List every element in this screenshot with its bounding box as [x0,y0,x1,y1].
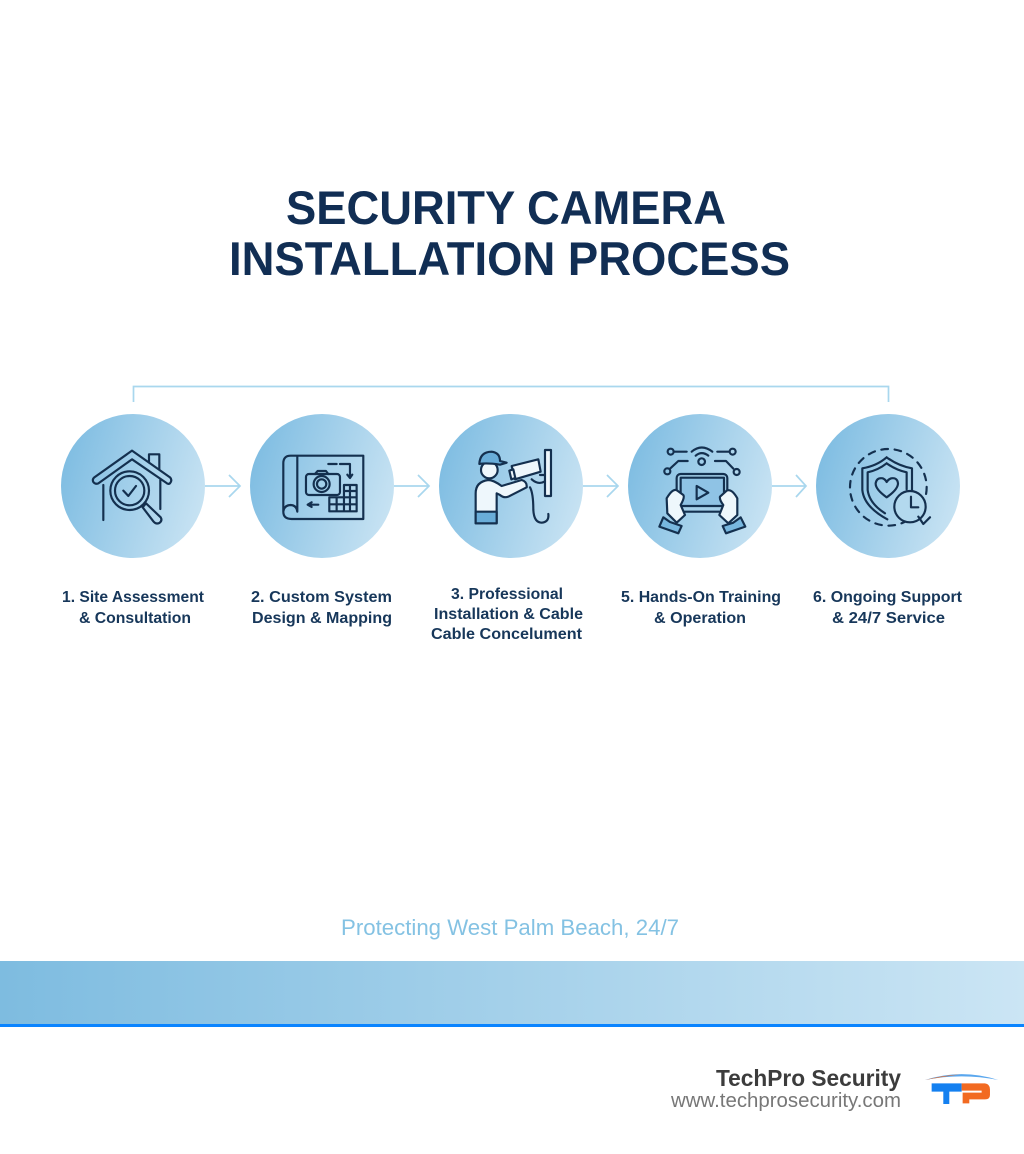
company name: TechPro Security [716,1065,901,1091]
label 5: & Operation [654,610,746,627]
icon: hands holding tablet [659,447,745,533]
icon: house with magnifier [93,451,171,524]
label 5: 5. Hands-On Training [621,589,781,606]
gradient band [0,961,1024,1024]
icon: technician installing camera [476,450,551,523]
blue rule [0,1024,1024,1027]
icon: blueprint with camera [283,456,363,519]
label 3: Installation & Cable [434,606,583,623]
step 1: site assessment [61,414,205,558]
label 3: Cable Concelument [431,626,583,643]
arrow 3 to 5 [583,475,618,497]
title: SECURITY CAMERA [286,181,726,234]
label 1: 1. Site Assessment [62,589,205,606]
logo [925,1074,998,1104]
label 3: 3. Professional [451,586,563,603]
icon: shield, heart and clock [850,449,930,526]
title: INSTALLATION PROCESS [229,232,790,285]
step 6: ongoing support [816,414,960,558]
arrow 2 to 3 [394,475,429,497]
label 2: 2. Custom System [251,589,392,606]
step 2: system design [250,414,394,558]
step 5: training [628,414,772,558]
arrow 5 to 6 [772,475,806,497]
label 6: 6. Ongoing Support [813,589,963,606]
label 2: Design & Mapping [252,610,392,627]
label 6: & 24/7 Service [832,610,945,627]
arrow 1 to 2 [205,475,240,497]
label 1: & Consultation [79,610,191,627]
tagline: Protecting West Palm Beach, 24/7 [341,915,679,940]
website: www.techprosecurity.com [670,1090,901,1112]
bracket connector [134,386,888,402]
title [229,181,790,285]
step 3: installation [439,414,583,558]
